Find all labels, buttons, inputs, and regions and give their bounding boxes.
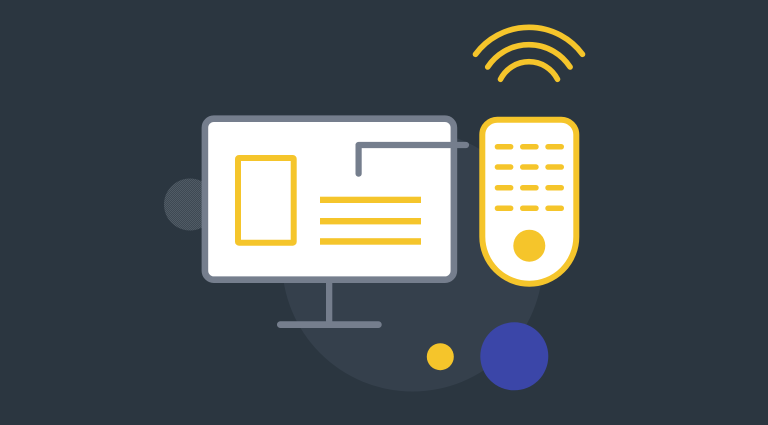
connector line — [359, 145, 466, 174]
screen text lines — [320, 197, 421, 245]
remote power button — [513, 230, 545, 262]
yellow dot — [427, 343, 454, 370]
remote control body — [482, 120, 576, 284]
screen image placeholder — [238, 158, 294, 243]
large background circle — [282, 130, 543, 392]
blue dot — [480, 322, 548, 390]
icon: wifi signal arcs — [476, 27, 582, 79]
monitor screen — [205, 119, 454, 280]
small hatched circle — [164, 178, 216, 230]
remote buttons — [495, 144, 564, 211]
monitor stand — [277, 280, 382, 328]
